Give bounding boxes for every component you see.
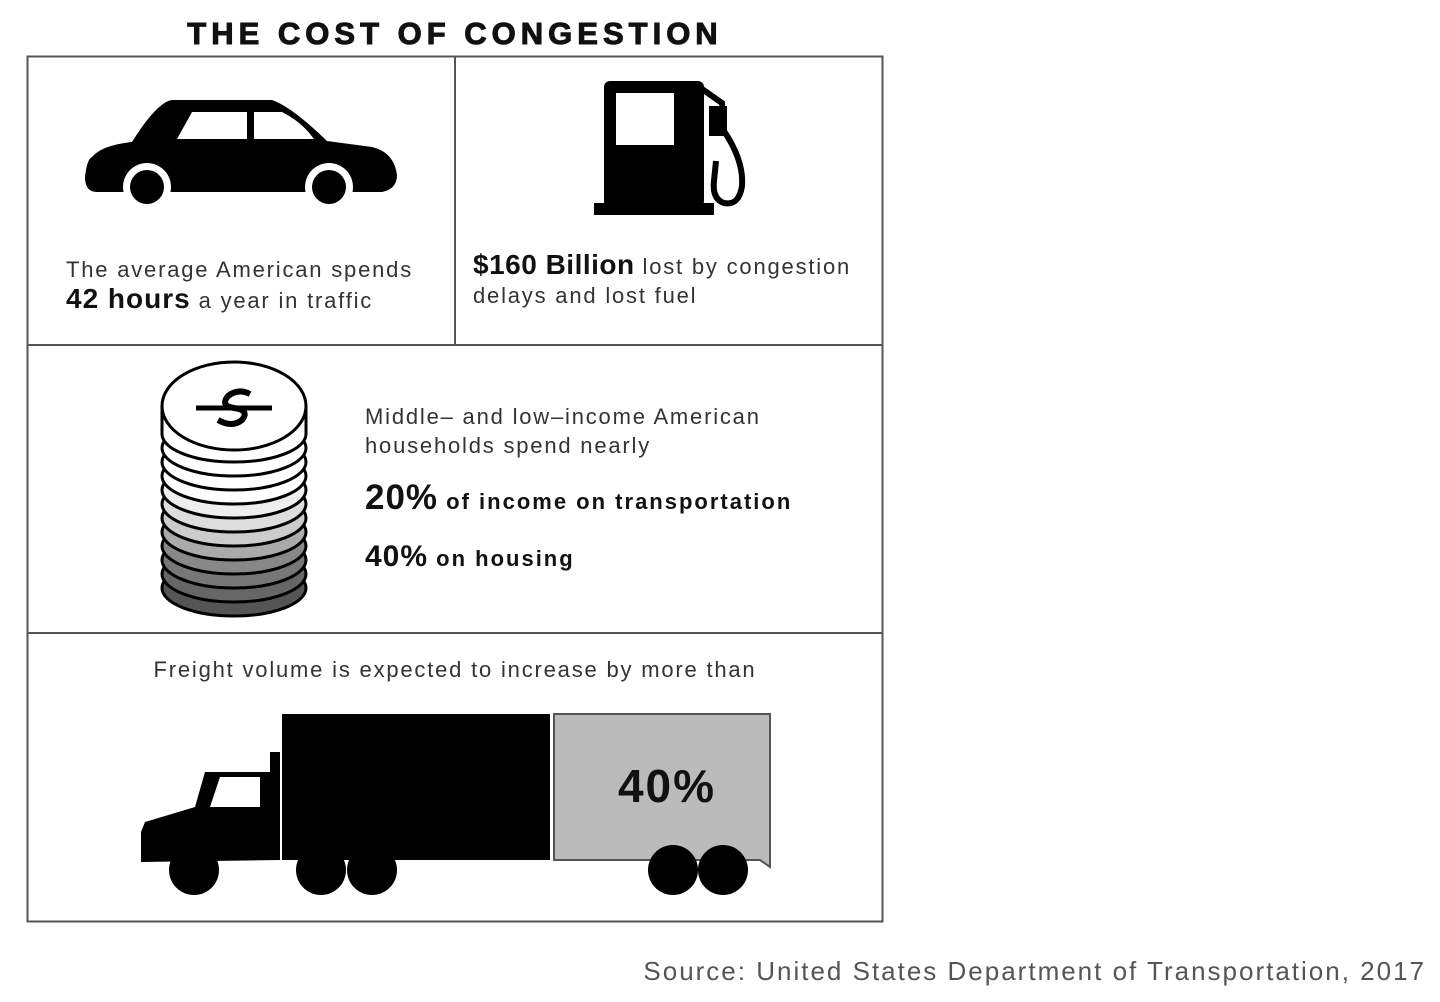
text: $160 billion: delays and lost fuel [473,283,697,308]
text: income spending: households spend nearly [365,433,651,458]
panel: household spending: 20% of income on transportation [365,478,792,517]
text: 42 hours: The average American spends [66,257,413,282]
text: freight: Freight volume is expected to increase by more than [154,657,756,682]
title: THE COST OF CONGESTION [187,16,723,51]
text: 42 hours: 42 hours a year in traffic [66,283,373,314]
panel: fuel cost [473,81,851,308]
text: $160 billion: $160 Billion lost by congestion [473,249,851,280]
icon: car [85,100,397,204]
panel: household spending: 40% on housing [365,540,575,573]
icon: truck [141,713,771,895]
text: 42 hours [66,257,413,314]
panel: hours in traffic [66,100,413,314]
icon: gas pump [594,81,746,215]
icon: truck: 40% [618,760,716,812]
text: income spending: Middle– and low–income American [365,404,761,429]
panel: freight [141,657,771,895]
source: Source: United States Department of Transportation, 2017 [643,956,1426,986]
icon: coin stack [160,360,308,618]
text: income spending [365,404,761,458]
text: $160 billion [473,249,851,308]
panel: household spending [160,360,792,618]
